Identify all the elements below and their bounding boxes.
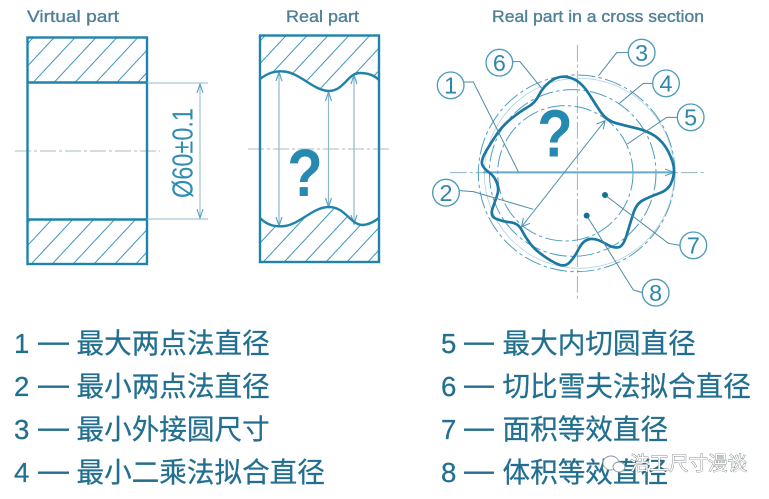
heading: Real part in a cross section: Real part in a cross section [492, 7, 704, 26]
centre line [248, 148, 392, 150]
circle 5: maximum inscribed [498, 106, 633, 241]
legend row 8: 体积等效直径 [502, 457, 668, 488]
numbered callouts [433, 39, 707, 306]
legend: left column [14, 328, 325, 488]
legend row 4: 4 [14, 457, 29, 488]
legend row 6: 切比雪夫法拟合直径 [502, 371, 751, 402]
callout numbers [440, 40, 700, 306]
axes [450, 45, 705, 302]
part outline [28, 38, 147, 264]
legend row 2: 最小两点法直径 [76, 371, 270, 402]
dots for 7 and 8 [584, 192, 608, 219]
hatched wall bottom [28, 220, 147, 264]
legend row 5: 最大内切圆直径 [502, 328, 696, 359]
circle 6: Chebyshev [484, 78, 674, 268]
callout numbers: 8 [649, 280, 662, 306]
legend row 1: 1 [14, 328, 29, 359]
hatched wall top [260, 36, 379, 91]
two-point measurement arrows [276, 72, 357, 226]
centre line [15, 150, 160, 152]
watermark icon [603, 456, 625, 472]
legend row 1: 最大两点法直径 [76, 328, 270, 359]
reference circles [478, 75, 675, 272]
measurement 2: minimum two-point line [522, 121, 605, 227]
legend row 4: 最小二乘法拟合直径 [76, 457, 325, 488]
dimension: diameter 60 [147, 83, 208, 219]
legend row 3: 3 [14, 414, 29, 445]
callout numbers: 2 [440, 180, 452, 206]
legend row 7: 7 [441, 414, 456, 445]
callout numbers: 5 [684, 105, 697, 131]
callout numbers: 4 [660, 71, 673, 97]
legend row 3: 最小外接圆尺寸 [76, 414, 270, 445]
callout numbers: 6 [493, 50, 506, 76]
heading: Virtual part: Virtual part [27, 7, 119, 26]
hatched wall top [28, 38, 147, 82]
legend row 7: 面积等效直径 [502, 414, 668, 445]
callout numbers: 3 [635, 40, 648, 66]
heading: Real part: Real part [286, 7, 359, 26]
legend row 5: 5 [441, 328, 456, 359]
diagram: virtual part [15, 38, 208, 264]
irregular cross-section profile [482, 77, 674, 265]
legend: right column [441, 328, 751, 488]
hatched wall bottom [260, 207, 379, 262]
circle 3: minimum circumscribed [478, 75, 675, 272]
diagram: real part [248, 36, 392, 262]
callout numbers: 1 [444, 73, 457, 99]
question mark: ? [537, 97, 573, 172]
part outline [260, 36, 379, 262]
dimension: diameter 60: Ø60±0.1 [168, 108, 200, 198]
diagram: cross section [433, 39, 707, 306]
legend row 6: 6 [441, 371, 456, 402]
measurement 1: maximum two-point line [483, 169, 674, 176]
callout numbers: 7 [687, 233, 700, 259]
legend row 2: 2 [14, 371, 29, 402]
leader lines [459, 53, 680, 293]
question mark: ? [287, 136, 323, 211]
watermark [603, 453, 747, 475]
watermark text: 浩工尺寸漫谈 [630, 453, 747, 475]
circle 4: least squares [489, 90, 656, 256]
legend row 8: 8 [441, 457, 456, 488]
